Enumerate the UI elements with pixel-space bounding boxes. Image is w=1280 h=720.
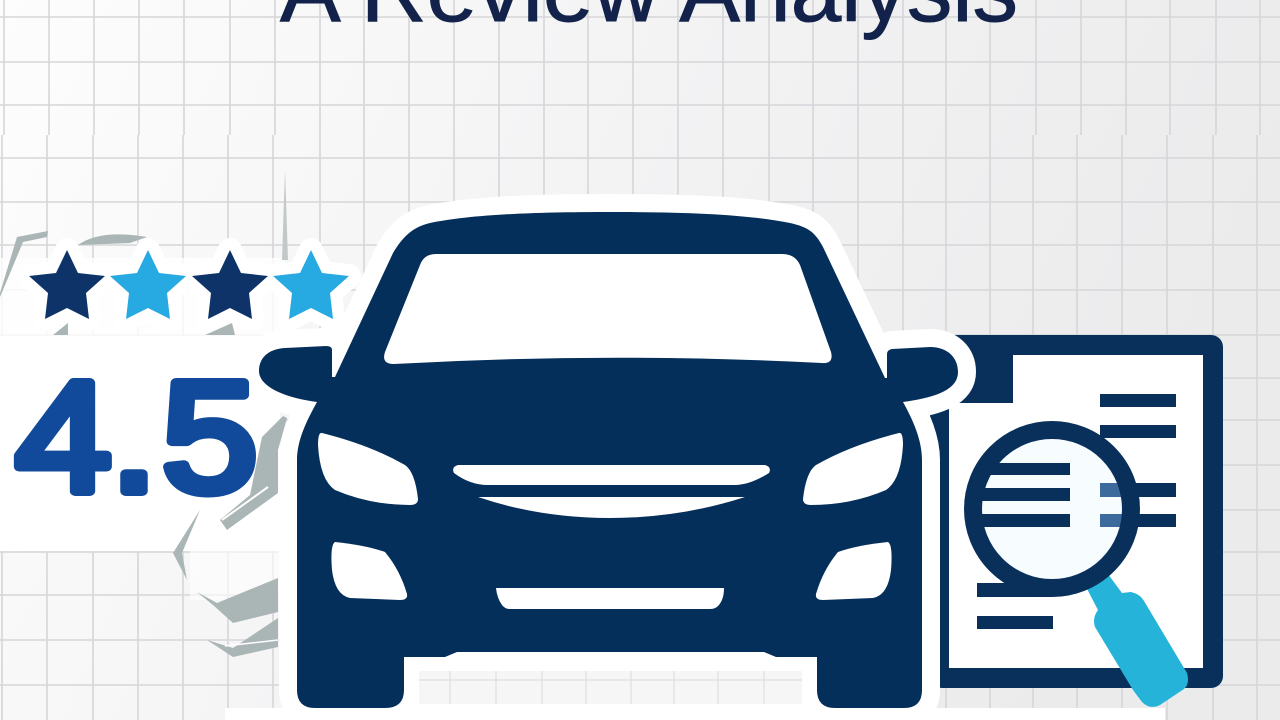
car front view: [259, 212, 958, 708]
rating value: 5: [162, 349, 258, 524]
white panel behind rating: [0, 336, 280, 551]
magnifier lens: [973, 430, 1131, 588]
car halo: [259, 212, 958, 708]
document icon with magnifier: [930, 335, 1223, 707]
white base strip: [225, 650, 1165, 720]
lower intake: [496, 588, 724, 609]
star rating: [29, 250, 349, 319]
fog lights: [331, 542, 892, 600]
gray brush strokes: [0, 170, 288, 657]
rating value: .: [110, 349, 158, 524]
magnifier handle: [1085, 570, 1188, 707]
grille: [453, 465, 770, 518]
rating value: 4: [15, 349, 111, 524]
windshield: [384, 254, 832, 364]
headlights: [318, 433, 903, 505]
